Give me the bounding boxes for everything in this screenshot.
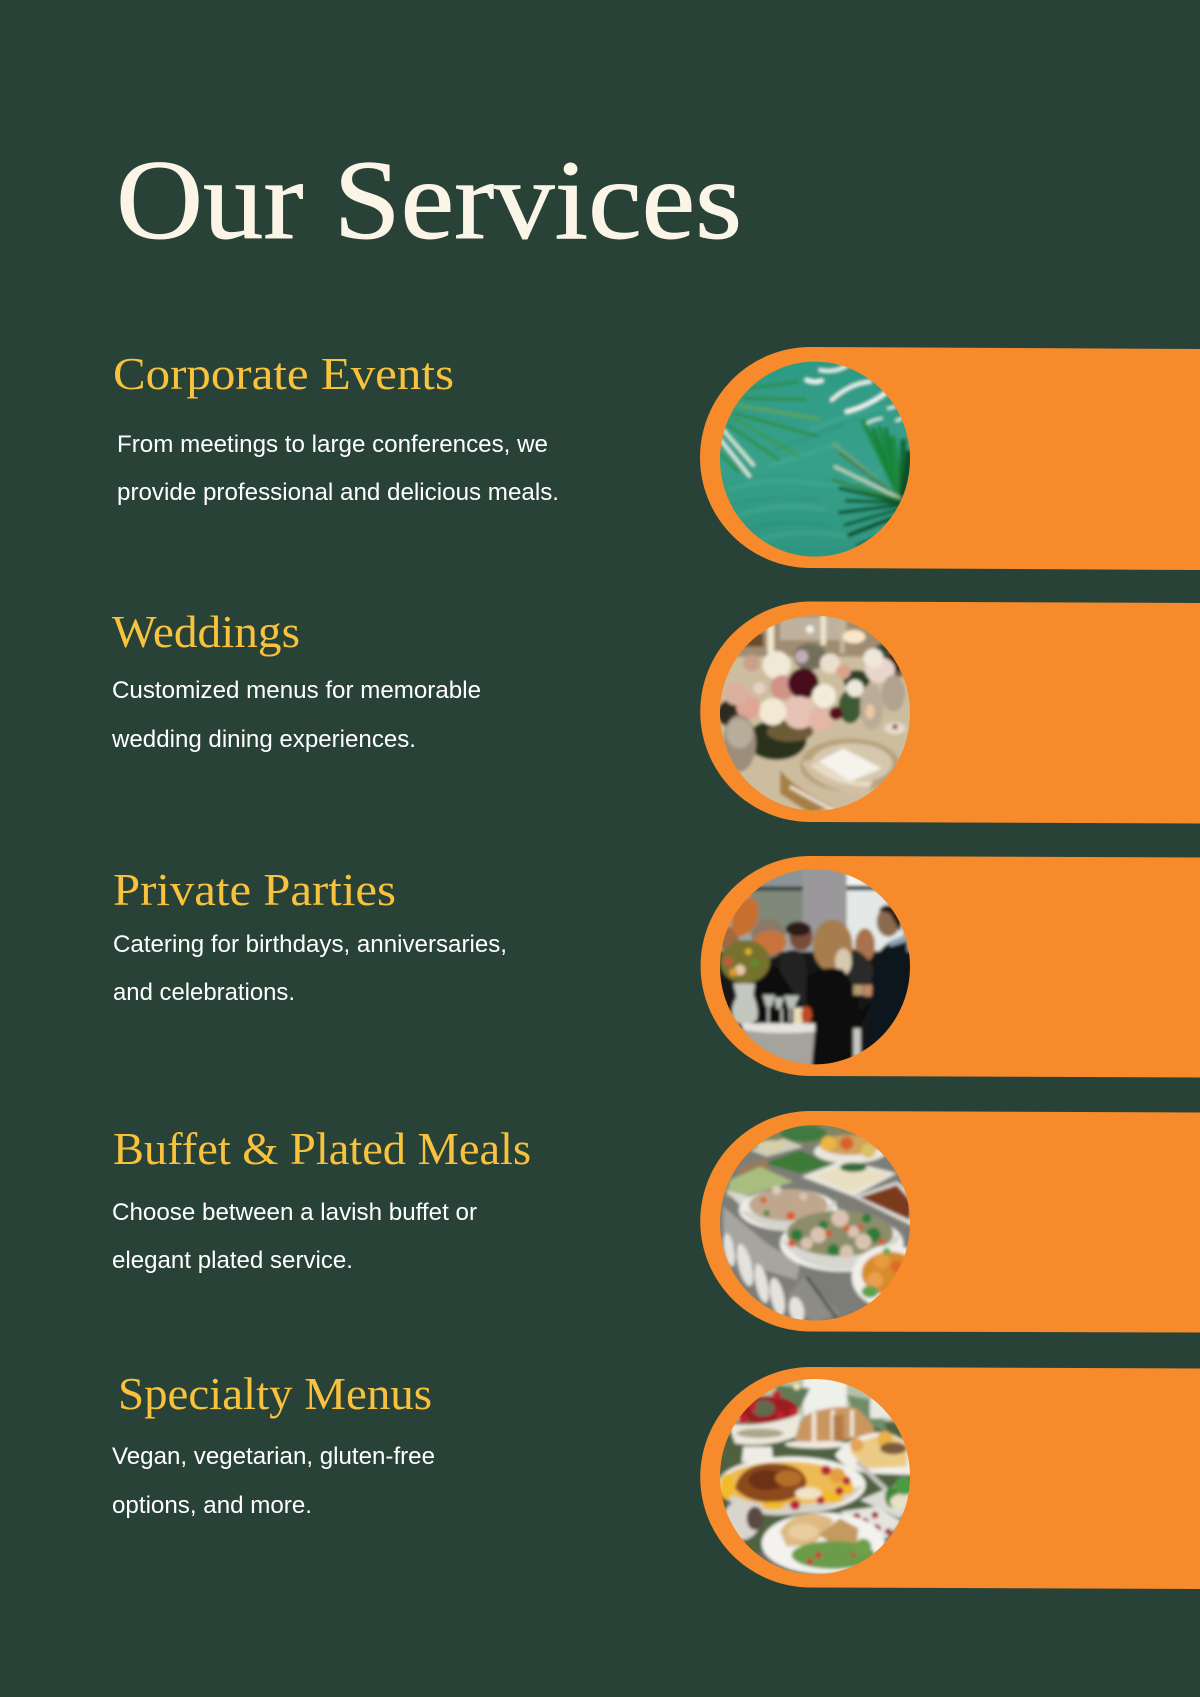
text: corporate events description xyxy=(117,431,559,506)
heading: corporate events: Corporate Events xyxy=(113,348,454,399)
text: weddings description xyxy=(111,677,481,753)
heading: buffet and plated meals: Buffet & Plated Meals xyxy=(113,1123,531,1174)
photo: buffet table xyxy=(720,1125,910,1321)
text: buffet description xyxy=(112,1199,477,1274)
photo: guests at a party xyxy=(720,869,910,1064)
text: private parties description xyxy=(113,931,507,1006)
orange pill xyxy=(700,602,1200,824)
panel: corporate events xyxy=(113,347,1200,570)
panel: weddings xyxy=(111,602,1200,824)
text: corporate events description: From meetings to large conferences, we xyxy=(117,431,548,458)
text: weddings description: Customized menus for memorable xyxy=(112,677,481,704)
text: private parties description: Catering for birthdays, anniversaries, xyxy=(113,931,507,958)
photo: water and palm leaves xyxy=(720,362,910,557)
orange pill xyxy=(700,347,1200,570)
text: specialty menus description: options, and more. xyxy=(112,1492,312,1519)
title: Our Services xyxy=(116,138,742,263)
text: buffet description: Choose between a lavish buffet or xyxy=(112,1199,477,1226)
orange pill xyxy=(700,1367,1200,1589)
text: private parties description: and celebrations. xyxy=(113,979,295,1006)
photo: holiday feast xyxy=(720,1379,910,1574)
orange pill xyxy=(701,856,1200,1078)
panel: private parties xyxy=(113,856,1200,1078)
orange pill xyxy=(700,1111,1200,1332)
text: specialty menus description: Vegan, vegetarian, gluten-free xyxy=(112,1443,435,1470)
text: specialty menus description xyxy=(112,1443,435,1519)
panel: specialty menus xyxy=(112,1367,1200,1589)
heading: private parties: Private Parties xyxy=(113,864,396,915)
panel: buffet and plated meals xyxy=(112,1111,1200,1332)
text: corporate events description: provide professional and delicious meals. xyxy=(117,479,559,506)
photo: wedding table flowers xyxy=(720,616,910,811)
text: weddings description: wedding dining experiences. xyxy=(111,726,416,753)
heading: weddings: Weddings xyxy=(112,606,300,657)
heading: specialty menus: Specialty Menus xyxy=(118,1368,432,1419)
text: buffet description: elegant plated service. xyxy=(112,1247,353,1274)
